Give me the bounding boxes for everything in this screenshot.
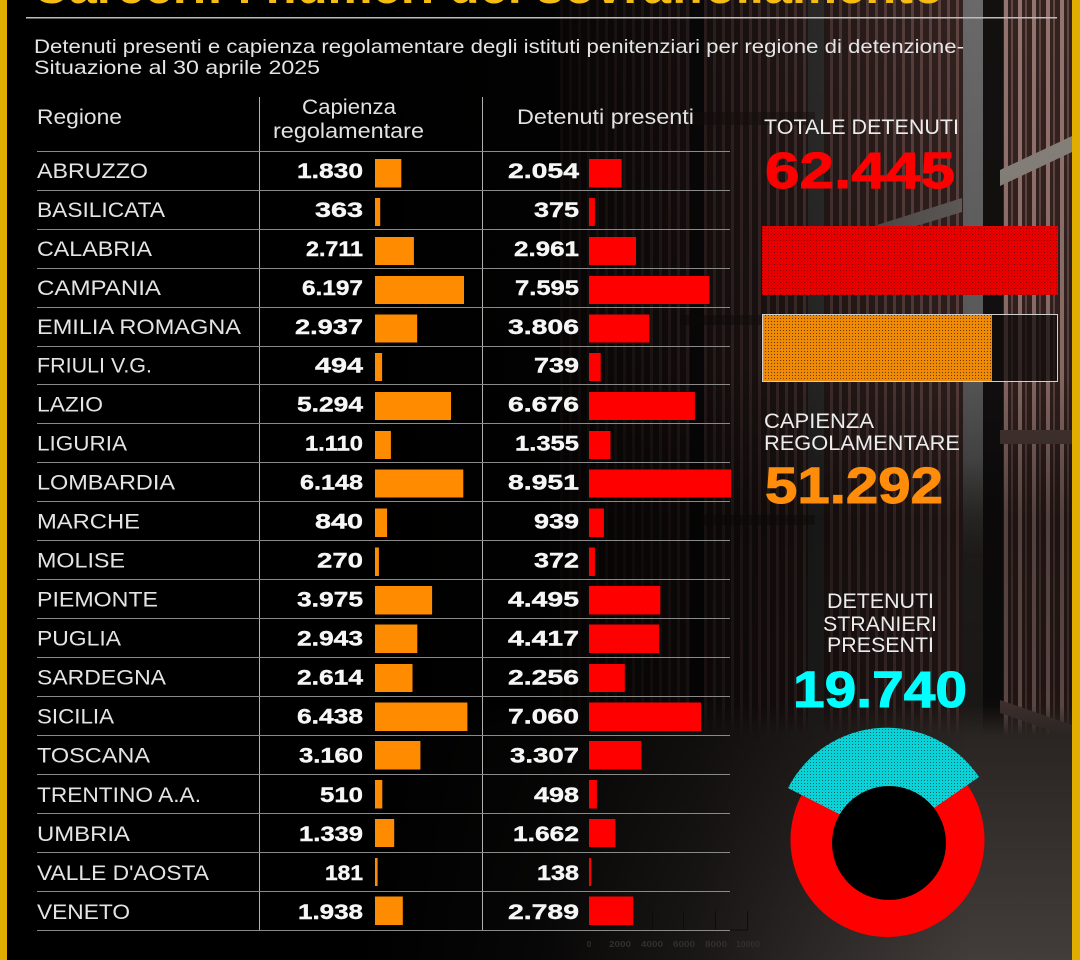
stat: regulatory capacity: REGOLAMENTARE	[764, 432, 960, 455]
stat: total detainees	[764, 116, 959, 199]
row: Liguria: 1.355	[515, 432, 579, 456]
row: Sardegna: 2.256	[508, 666, 579, 690]
stat: total detainees: TOTALE DETENUTI	[764, 116, 959, 139]
stat: foreign detainees: PRESENTI	[827, 634, 934, 657]
row: Molise: 270	[317, 550, 363, 572]
row: Emilia Romagna	[37, 314, 649, 342]
row: Calabria: 2.961	[514, 238, 579, 261]
row: Calabria: CALABRIA	[37, 238, 152, 261]
faint chart axis: 8000	[705, 940, 728, 949]
faint chart axis	[587, 911, 761, 949]
row: Lombardia: 8.951	[508, 472, 579, 494]
stat: regulatory capacity	[764, 410, 960, 514]
stat: foreign detainees	[793, 590, 967, 718]
row: Sicilia: 6.438	[297, 706, 363, 728]
row: Veneto: 1.938	[298, 901, 363, 924]
row: Sardegna: SARDEGNA	[37, 666, 166, 690]
row: Basilicata	[37, 198, 595, 226]
bar: regulatory capacity	[762, 314, 1058, 382]
faint chart axis: 4000	[641, 940, 664, 949]
row: Trentino A.A.	[37, 780, 597, 808]
row: Basilicata: BASILICATA	[37, 199, 165, 222]
row: Valle d'Aosta: 181	[325, 862, 363, 885]
row: Lombardia: 6.148	[300, 472, 363, 494]
row: Umbria: 1.662	[513, 823, 579, 846]
table column headers: regolamentare	[273, 120, 424, 143]
row: Toscana: 3.307	[510, 744, 579, 768]
row: Emilia Romagna: 2.937	[295, 316, 363, 339]
row: Toscana: TOSCANA	[37, 744, 150, 768]
row: Abruzzo: 2.054	[508, 160, 579, 183]
row: Piemonte	[37, 586, 660, 614]
row: Sicilia	[37, 702, 701, 731]
row: Lazio: 5.294	[297, 394, 363, 416]
stat: foreign detainees: STRANIERI	[823, 613, 937, 636]
row: Friuli V.G.	[37, 353, 601, 381]
row: Veneto	[37, 896, 633, 925]
row: Marche: 840	[315, 510, 363, 534]
row: Piemonte: PIEMONTE	[37, 588, 158, 612]
faint chart axis: 0	[587, 940, 592, 949]
row: Abruzzo: ABRUZZO	[37, 160, 148, 183]
table: regions, capacity and detainees	[37, 96, 731, 931]
stat: regulatory capacity: 51.292	[765, 457, 943, 514]
row: Toscana	[37, 741, 641, 770]
row: Liguria	[37, 431, 610, 459]
row: Campania: CAMPANIA	[37, 277, 161, 300]
row: Trentino A.A.: TRENTINO A.A.	[37, 784, 201, 807]
bar: total detainees	[762, 226, 1058, 295]
row: Trentino A.A.: 510	[320, 784, 363, 807]
row: Molise: MOLISE	[37, 550, 125, 572]
row: Valle d'Aosta: VALLE D'AOSTA	[37, 862, 209, 885]
row: Lombardia	[37, 470, 731, 498]
row: Umbria	[37, 819, 615, 847]
row: Umbria: UMBRIA	[37, 823, 130, 846]
row: Calabria: 2.711	[306, 238, 363, 261]
row: Campania: 6.197	[302, 277, 363, 300]
subtitle: Situazione al 30 aprile 2025	[34, 57, 320, 79]
row: Liguria: 1.110	[305, 432, 363, 456]
row: Friuli V.G.: 739	[534, 354, 579, 378]
row: Lazio: LAZIO	[37, 394, 103, 416]
row: Valle d'Aosta	[37, 858, 591, 886]
table column headers: Regione	[37, 106, 122, 129]
row: Sicilia: SICILIA	[37, 706, 114, 728]
row: Lombardia: LOMBARDIA	[37, 472, 175, 494]
row: Marche	[37, 508, 604, 537]
donut chart: foreign detainees share	[788, 728, 984, 937]
row: Abruzzo: 1.830	[297, 160, 363, 183]
row: Sardegna: 2.614	[297, 666, 363, 690]
row: Piemonte: 4.495	[508, 588, 579, 612]
row: Emilia Romagna: EMILIA ROMAGNA	[37, 316, 241, 339]
row: Valle d'Aosta: 138	[537, 862, 579, 885]
table column headers	[37, 96, 694, 143]
row: Campania	[37, 276, 710, 304]
row: Lazio: 6.676	[508, 394, 579, 416]
row: Friuli V.G.: 494	[315, 354, 363, 378]
row: Sicilia: 7.060	[508, 706, 579, 728]
row: Toscana: 3.160	[299, 744, 363, 768]
subtitle: Detenuti presenti e capienza regolamentare degli istituti penitenziari per regione di detenzione-	[34, 36, 964, 58]
row: Molise: 372	[534, 550, 579, 572]
table column headers: Detenuti presenti	[517, 106, 694, 129]
row: Abruzzo	[37, 159, 622, 188]
row: Puglia	[37, 624, 659, 653]
row: Emilia Romagna: 3.806	[508, 316, 579, 339]
row: Puglia: 4.417	[508, 628, 579, 650]
row: Calabria	[37, 237, 636, 265]
row: Basilicata: 363	[315, 199, 363, 222]
faint chart axis: 10000	[736, 940, 761, 949]
row: Marche: 939	[534, 510, 579, 534]
row: Veneto: VENETO	[37, 901, 130, 924]
faint chart axis: 6000	[673, 940, 696, 949]
table column headers: Capienza	[302, 96, 396, 119]
row: Lazio	[37, 392, 695, 420]
row: Piemonte: 3.975	[297, 588, 363, 612]
row: Puglia: 2.943	[297, 628, 363, 650]
row: Sardegna	[37, 664, 625, 692]
stat: foreign detainees: 19.740	[793, 661, 967, 718]
row: Basilicata: 375	[534, 199, 579, 222]
row: Puglia: PUGLIA	[37, 628, 121, 650]
row: Trentino A.A.: 498	[534, 784, 579, 807]
row: Molise	[37, 548, 595, 576]
stat: total detainees: 62.445	[765, 142, 955, 199]
row: Marche: MARCHE	[37, 510, 140, 534]
stat: regulatory capacity: CAPIENZA	[764, 410, 874, 433]
faint chart axis: 2000	[609, 940, 632, 949]
row: Liguria: LIGURIA	[37, 432, 127, 456]
row: Friuli V.G.: FRIULI V.G.	[37, 354, 152, 378]
row: Veneto: 2.789	[508, 901, 579, 924]
stat: foreign detainees: DETENUTI	[827, 590, 934, 613]
row: Umbria: 1.339	[299, 823, 363, 846]
row: Campania: 7.595	[515, 277, 579, 300]
